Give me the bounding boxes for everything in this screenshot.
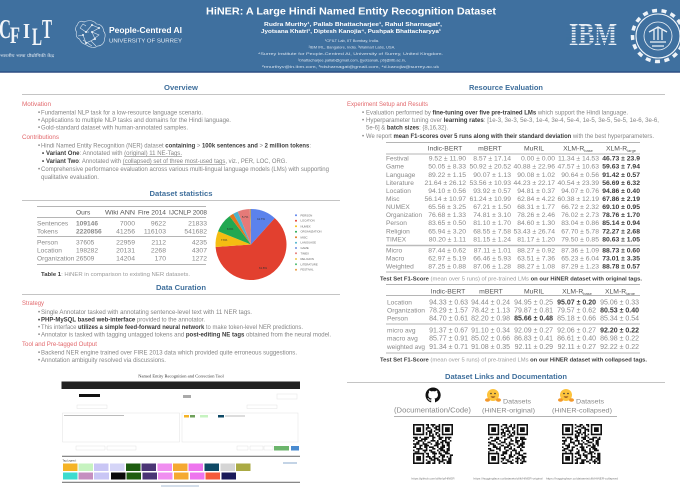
table: collapsed tags: 82.20 ± 0.98: [471, 316, 510, 322]
table: original tags: MuRIL: [524, 146, 544, 152]
annotation tool screenshot: Named Entity Recognition and Correction Tool: [138, 374, 224, 378]
pie legend: [295, 213, 322, 272]
table: original tags: 76.02 ± 2.73: [561, 212, 599, 219]
table: original tags: 21.64 ± 26.12: [424, 180, 466, 187]
table: original tags: Weighted: [386, 263, 414, 270]
table: comparison with existing NER datasets: 109146: [76, 220, 98, 228]
table: comparison with existing NER datasets: 198282: [76, 248, 98, 254]
contributions text: Variant Two: Annotated with (collapsed) set of three most-used tags, viz., PER, LOC, ORG.: [46, 159, 287, 165]
icon: hugging face collapsed: [558, 389, 574, 402]
motivation text: •: [38, 110, 40, 116]
table: original tags: 80.63 ± 1.05: [602, 236, 640, 243]
table: comparison with existing NER datasets: 21833: [188, 220, 207, 228]
table: original tags: 62.84 ± 4.22: [517, 196, 555, 203]
tool and pre-tagged output text: [22, 342, 297, 364]
table: original tags: 88.73 ± 0.60: [602, 247, 640, 254]
pie legend: ORGANIZATION: [300, 230, 322, 234]
table: original tags: Macro: [386, 255, 405, 262]
table: original tags: 62.97 ± 5.19: [428, 255, 466, 262]
pie legend: LANGUAGE: [300, 241, 316, 245]
table: collapsed tags: 92.06 ± 0.27: [557, 327, 596, 334]
table: original tags: Organization: [386, 212, 422, 219]
strategy text: •: [38, 310, 40, 316]
table: original tags: 93.92 ± 0.57: [473, 188, 511, 195]
table: original tags: 56.69 ± 6.32: [602, 180, 640, 187]
panel: dataset links and documentation: [347, 372, 665, 480]
pie chart: 8.9%: [227, 227, 234, 231]
table: original tags: 67.86 ± 2.19: [602, 196, 640, 203]
pie chart: 7.6%: [221, 238, 228, 242]
table: original tags: 46.73 ± 23.9: [602, 156, 640, 162]
label: datasets collapsed: Datasets: [576, 398, 605, 406]
table: original tags: TIMEX: [386, 236, 407, 243]
table: original tags: 90.08 ± 1.02: [517, 172, 555, 179]
table: original tags: 88.27 ± 1.08: [517, 263, 555, 270]
table: original tags: 94.81 ± 0.37: [517, 188, 555, 195]
experiment setup text: •: [362, 110, 364, 116]
table: original tags: 50.05 ± 8.33: [428, 164, 466, 170]
table: original tags: 89.22 ± 1.15: [428, 172, 466, 179]
table: comparison with existing NER datasets: 14204: [116, 256, 135, 262]
logo: CFILT: L: [32, 24, 42, 51]
table: collapsed tags: 92.11 ± 0.29: [515, 344, 553, 351]
table: comparison with existing NER datasets: Organization: [37, 256, 75, 262]
table: original tags: XLM-R: [563, 146, 584, 152]
table: original tags: 44.23 ± 22.17: [513, 180, 555, 187]
table: comparison with existing NER datasets: 7000: [120, 220, 135, 228]
table: collapsed tags: 85.18 ± 0.66: [557, 316, 596, 322]
table: collapsed tags: 95.07 ± 0.20: [557, 300, 596, 306]
table: collapsed tags: 95.06 ± 0.33: [600, 300, 639, 306]
table: comparison with existing NER datasets: 4307: [192, 248, 207, 254]
strategy text: Single Annotator tasked with annotating sentence-level text with 11 NER tags.: [41, 310, 252, 316]
header banner: [0, 0, 680, 73]
table: collapsed tags: [386, 284, 640, 353]
table: original tags: Game: [386, 164, 404, 170]
authors: Rudra Murthy¹, Pallab Bhattacharjee¹, Rahul Sharnagat²,: [264, 21, 443, 28]
contributions text: Contributions: [22, 135, 59, 141]
logo: People-Centred AI: UNIVERSITY OF SURREY: [109, 38, 182, 44]
table: original tags: 68.55 ± 7.58: [473, 228, 511, 235]
table: collapsed tags: 86.83 ± 0.41: [514, 336, 553, 342]
table: comparison with existing NER datasets: Person: [37, 240, 58, 246]
table: original tags: 85.14 ± 0.94: [602, 220, 640, 227]
table: original tags: Misc: [386, 196, 400, 203]
table: collapsed tags: Organization: [387, 308, 425, 314]
table: collapsed tags: 92.11 ± 0.27: [558, 344, 596, 351]
table: comparison with existing NER datasets: 116103: [144, 228, 166, 236]
panel: data curation: [22, 283, 340, 486]
table: original tags: large: [627, 148, 637, 153]
table: original tags: 9.52 ± 11.90: [429, 156, 466, 162]
authors: [261, 21, 443, 35]
logo: CFILT: T: [42, 14, 52, 44]
table: collapsed tags: Location: [387, 300, 412, 306]
table: original tags: XLM-R: [606, 146, 627, 152]
strategy text: This interface utilizes a simple feed-forward neural network to make token-level NER predictions.: [41, 325, 303, 331]
table: collapsed tags: 91.08 ± 0.35: [471, 344, 510, 351]
strategy text: •: [38, 318, 40, 324]
affiliations: ¹CFILT Lab, IIT Bombay, India.: [325, 38, 379, 43]
pie legend: LOCATION: [300, 219, 315, 223]
dataset URLs: https://github.com/cfiltnlp/HiNER: [411, 476, 455, 480]
logo: IIT Bombay gear: [632, 10, 680, 62]
pie chart: 5.7%: [242, 215, 249, 219]
table: original tags: 88.27 ± 0.92: [517, 247, 555, 254]
table: collapsed tags: Indic-BERT: [431, 288, 465, 295]
label: datasets original: [482, 398, 535, 414]
table: original tags: 80.20 ± 1.11: [429, 236, 466, 243]
table: collapsed tags: 92.09 ± 0.27: [514, 327, 553, 334]
table: comparison with existing NER datasets: 170: [155, 256, 166, 262]
table: original tags: 83.65 ± 0.50: [428, 220, 466, 227]
QR code: HiNER collapsed: [562, 424, 602, 464]
logo: CFILT: [0, 14, 55, 58]
pie chart: 11.7%: [257, 217, 265, 221]
affiliations: ⁴Surrey Institute for People-Centred AI, University of Surrey, United Kingdom.: [258, 51, 443, 56]
contributions text: Comprehensive performance evaluation across various multi-lingual language models (LMs) with supporting: [41, 167, 329, 173]
table: comparison with existing NER datasets: Tokens: [37, 228, 59, 236]
table: comparison with existing NER datasets: Sentences: [37, 220, 69, 228]
table: original tags: 53.56 ± 10.93: [469, 180, 511, 187]
table: original tags: 87.25 ± 0.88: [428, 263, 466, 270]
pie legend: LITERATURE: [300, 262, 318, 266]
icon: github: [426, 388, 441, 402]
table: collapsed tags: 94.33 ± 0.63: [429, 300, 468, 306]
pie legend: TIMEX: [300, 251, 309, 255]
affiliations: ²IBM IRL, Bangalore, India. ³Walmart Labs, USA.: [309, 44, 395, 50]
table: collapsed tags: macro avg: [387, 336, 418, 342]
table: original tags: 90.07 ± 1.13: [473, 172, 511, 179]
table: comparison with existing NER datasets: 20131: [116, 248, 135, 254]
table: original tags: 67.70 ± 5.78: [561, 228, 599, 235]
table: original tags: 11.34 ± 14.53: [558, 156, 599, 162]
heading: resource evaluation: Resource Evaluation: [469, 83, 543, 92]
label: datasets original: Datasets: [503, 398, 532, 406]
heading: dataset links: Dataset Links and Documentation: [445, 372, 567, 381]
table: original tags: mBERT: [478, 146, 502, 152]
table: original tags: 74.81 ± 3.10: [473, 212, 511, 219]
caption: original tags: Test Set F1-Score (mean over 5 runs) of pre-trained LMs on our HiNER dataset with original tags.: [380, 276, 642, 282]
panel: dataset statistics: [22, 189, 340, 280]
table: comparison with existing NER datasets: Location: [37, 248, 62, 254]
table: comparison with existing NER datasets: 2112: [151, 240, 166, 246]
tool and pre-tagged output text: •: [38, 350, 40, 356]
table: original tags: 65.23 ± 6.04: [561, 255, 599, 262]
table: collapsed tags: 85.66 ± 0.48: [514, 316, 553, 322]
table: collapsed tags: 92.20 ± 0.22: [600, 327, 639, 334]
table: collapsed tags: 78.29 ± 1.57: [429, 308, 468, 314]
contributions text: •: [42, 159, 44, 165]
dataset URLs: https://huggingface.co/datasets/cfilt/HiNER-original: [474, 476, 543, 480]
table: original tags: 87.11 ± 1.01: [474, 247, 511, 254]
table: original tags: 94.86 ± 0.40: [602, 188, 640, 195]
panel: resource evaluation: [340, 83, 665, 363]
experiment setup text: Hyperparameter tuning over learning rates: [1e-3, 3e-3, 5e-3, 1e-4, 3e-4, 5e-4, 1e-5, 3e-5, 5e-5, 1e-6, 3e-6,: [366, 118, 659, 124]
contributions text: Hindi Named Entity Recognition (NER) dataset containing > 100k sentences and > 2 million tokens:: [41, 144, 311, 150]
logo: IBM: IBM: [569, 16, 617, 52]
motivation text: Applications to multiple NLP tasks and domains for the Hindi language.: [41, 118, 231, 124]
table: original tags: Festival: [386, 156, 409, 162]
title: HiNER: A Large Hindi Named Entity Recognition Dataset: [206, 6, 497, 18]
label: documentation and code: (Documentation/Code): [394, 408, 471, 414]
panel: overview: [22, 83, 340, 181]
table: collapsed tags: 84.70 ± 0.61: [429, 316, 468, 322]
table: original tags: 81.17 ± 1.20: [517, 236, 555, 243]
table: collapsed tags: micro avg: [387, 327, 416, 334]
table: original tags: 53.43 ± 26.74: [513, 228, 555, 235]
table: original tags: 8.57 ± 17.14: [473, 156, 511, 162]
table: original tags: 87.36 ± 1.09: [561, 247, 599, 254]
logo: CFILT: F: [10, 23, 20, 48]
table: collapsed tags: 85.02 ± 0.66: [471, 336, 510, 342]
motivation text: [22, 102, 231, 132]
table: collapsed tags: 91.34 ± 0.71: [429, 344, 468, 351]
experiment setup text: 5e-6] & batch sizes: {8,16,32}.: [366, 126, 448, 132]
table: collapsed tags: weighted avg: [386, 344, 425, 351]
affiliations: [258, 38, 443, 69]
experiment setup text: •: [362, 134, 364, 140]
contributions text: Variant One: Annotated with (original) 11 NE-Tags.: [46, 151, 182, 157]
table: original tags: 87.44 ± 0.62: [428, 247, 466, 254]
table: comparison with existing NER datasets: [37, 206, 207, 264]
motivation text: •: [38, 126, 40, 132]
table: original tags: 76.68 ± 1.33: [428, 212, 466, 219]
table: collapsed tags: 91.10 ± 0.34: [471, 327, 510, 334]
table: original tags: 40.54 ± 23.39: [557, 180, 599, 187]
table: original tags: 66.72 ± 2.32: [561, 204, 599, 211]
table: original tags: Literature: [386, 180, 414, 187]
pie chart: 61.8%: [259, 266, 267, 270]
table: collapsed tags: 94.95 ± 0.25: [514, 300, 553, 306]
table: collapsed tags: 79.87 ± 0.81: [514, 308, 553, 314]
logo: CFILT: I: [23, 19, 30, 43]
dataset URLs: https://huggingface.co/datasets/cfilt/HiNER-collapsed: [546, 476, 618, 480]
experiment setup text: We report mean F1-scores over 5 runs along with their standard deviation with the best hyperparameters.: [366, 134, 654, 140]
table: comparison with existing NER datasets: 9622: [151, 220, 166, 228]
table: original tags: 61.24 ± 10.99: [469, 196, 511, 203]
motivation text: Gold-standard dataset with human-annotated samples.: [41, 126, 188, 132]
label: datasets collapsed: [552, 398, 612, 414]
table: original tags: 81.15 ± 1.24: [473, 236, 511, 243]
table: original tags: 87.29 ± 1.23: [561, 263, 599, 270]
table: original tags: 73.01 ± 3.35: [602, 255, 640, 262]
tool and pre-tagged output text: Annotation ambiguity resolved via discussions.: [41, 358, 166, 364]
table: original tags: 67.21 ± 1.50: [473, 204, 511, 211]
caption: collapsed tags: Test Set F1-Score (mean over 5 runs) of pre-trained LMs on our HiNER dataset with collapsed tags.: [380, 357, 647, 363]
table: original tags: 94.10 ± 0.56: [428, 188, 466, 195]
affiliations: ¹bhattacharjee.pallab@gmail.com, {jyotsanak, pb}@iitb.ac.in,: [298, 58, 406, 62]
table: original tags: 63.51 ± 7.36: [517, 255, 555, 262]
table: original tags: 56.14 ± 10.97: [424, 196, 466, 203]
table: original tags: 69.10 ± 0.95: [602, 204, 640, 211]
tool and pre-tagged output text: •: [38, 358, 40, 364]
table: comparison with existing NER datasets: 37605: [76, 240, 95, 246]
table: original tags: NUMEX: [386, 204, 410, 211]
table: collapsed tags: 92.22 ± 0.22: [600, 344, 639, 351]
table: original tags: 87.06 ± 1.28: [473, 263, 511, 270]
experiment setup text: •: [362, 118, 364, 124]
pie legend: GAME: [300, 246, 309, 250]
contributions text: •: [38, 144, 40, 150]
pie legend: MISC: [300, 235, 308, 239]
table: original tags: 79.50 ± 0.85: [561, 236, 599, 243]
strategy text: •: [38, 332, 40, 338]
table: original tags: Micro: [386, 247, 402, 254]
table: comparison with existing NER datasets: 1272: [192, 256, 207, 262]
icon: hugging face original: [485, 389, 501, 402]
annotation tool screenshot: [62, 374, 300, 486]
contributions text: •: [42, 151, 44, 157]
table: original tags: 47.57 ± 10.63: [557, 164, 599, 170]
table: collapsed tags: 91.37 ± 0.67: [429, 327, 468, 334]
table: comparison with existing NER datasets: 2268: [151, 248, 166, 254]
experiment setup text: Evaluation performed by fine-tuning over five pre-trained LMs which support the Hindi language.: [366, 110, 628, 116]
table: original tags: 50.92 ± 20.52: [469, 164, 511, 170]
experiment setup text: Experiment Setup and Results: [347, 102, 428, 108]
table caption: Table 1: HiNER in comparison to existing NER datasets.: [41, 272, 190, 278]
table: original tags: 88.78 ± 0.57: [602, 263, 640, 270]
table: original tags: 81.10 ± 1.70: [473, 220, 511, 227]
table: comparison with existing NER datasets: 541682: [184, 228, 207, 236]
logo: People-Centred AI: [76, 21, 182, 47]
table: original tags: 72.27 ± 2.68: [602, 228, 640, 235]
table: collapsed tags: 80.53 ± 0.40: [600, 308, 639, 314]
table: collapsed tags: base: [583, 291, 593, 296]
table: collapsed tags: 85.34 ± 0.54: [600, 316, 639, 322]
annotation tool screenshot: Tag Legend:: [62, 460, 77, 462]
heading: overview: Overview: [164, 83, 198, 92]
contributions text: qualitative evaluation.: [41, 175, 99, 181]
table: comparison with existing NER datasets: 41256: [116, 228, 135, 236]
table: comparison with existing NER datasets: 22959: [116, 240, 135, 246]
table: original tags: 59.63 ± 7.94: [602, 164, 640, 170]
contributions text: [22, 135, 329, 181]
pie chart: [216, 209, 287, 280]
label: datasets original: (HiNER-original): [482, 408, 535, 414]
table: original tags: base: [584, 148, 594, 153]
table: collapsed tags: XLM-R: [605, 288, 626, 295]
table: original tags: 0.00 ± 0.00: [521, 156, 555, 162]
strategy text: Strategy: [22, 301, 44, 307]
table: collapsed tags: large: [626, 291, 636, 296]
strategy text: •: [38, 325, 40, 331]
table: original tags: 90.64 ± 0.56: [561, 172, 599, 179]
table: comparison with existing NER datasets: IJCNLP 2008: [169, 210, 207, 216]
motivation text: Motivation: [22, 102, 51, 108]
table: original tags: 83.04 ± 0.86: [561, 220, 599, 227]
table: collapsed tags: MuRIL: [524, 288, 544, 295]
pie legend: FESTIVAL: [300, 268, 314, 272]
table: original tags: 84.60 ± 1.30: [517, 220, 555, 227]
table: original tags: 91.42 ± 0.57: [602, 172, 640, 179]
pie legend: RELIGION: [300, 257, 314, 261]
table: original tags: Person: [386, 220, 407, 227]
experiment setup text: [347, 102, 659, 140]
authors: Jyotsana Khatri¹, Diptesh Kanojia⁴, Pushpak Bhattacharyya¹: [261, 28, 441, 35]
logo: People-Centred AI: People-Centred AI: [109, 26, 182, 35]
tool and pre-tagged output text: Backend NER engine trained over FIRE 2013 data which provided quite erroneous suggestions.: [41, 350, 297, 356]
strategy text: PHP-MySQL based web-interface provided to the annotator.: [41, 318, 205, 324]
table: original tags: Indic-BERT: [428, 146, 462, 152]
heading: data curation: Data Curation: [156, 283, 206, 292]
table: collapsed tags: Person: [387, 316, 408, 322]
table: collapsed tags: mBERT: [479, 288, 503, 295]
table: original tags: 60.38 ± 12.19: [557, 196, 599, 203]
table: collapsed tags: 79.57 ± 0.62: [557, 308, 596, 314]
table: original tags: 65.94 ± 3.20: [428, 228, 466, 235]
label: datasets collapsed: (HiNER-collapsed): [552, 408, 612, 414]
table: collapsed tags: 94.44 ± 0.24: [471, 300, 510, 306]
table: collapsed tags: XLM-R: [562, 288, 583, 295]
table: comparison with existing NER datasets: Wiki ANN: [105, 210, 135, 216]
table: original tags: 65.56 ± 3.25: [428, 204, 466, 211]
strategy text: [22, 301, 331, 338]
tool and pre-tagged output text: Tool and Pre-tagged Output: [22, 342, 97, 348]
table: original tags: 94.07 ± 0.76: [561, 188, 599, 195]
QR code: github: [413, 424, 453, 464]
table: comparison with existing NER datasets: Ours: [76, 210, 91, 216]
motivation text: •: [38, 118, 40, 124]
pie legend: PERSON: [300, 213, 312, 217]
QR code: HiNER original: [488, 424, 528, 464]
table: original tags: 78.26 ± 2.46: [517, 212, 555, 219]
heading: dataset statistics: Dataset statistics: [150, 189, 212, 198]
pie legend: NUMEX: [300, 224, 311, 228]
table: comparison with existing NER datasets: 4235: [192, 240, 207, 246]
table: collapsed tags: 86.98 ± 0.22: [600, 336, 639, 342]
motivation text: Fundamental NLP task for a low-resource language scenario.: [41, 110, 203, 116]
contributions text: •: [38, 167, 40, 173]
table: original tags: 78.76 ± 1.70: [602, 212, 640, 219]
logo: CFILT: भारतीय भाषा प्रौद्योगिकी केंद्र: [0, 53, 55, 58]
affiliations: ²rmurthyv@in.ibm.com, ³rdsharnagat@gmail.com, ⁴d.kanojia@surrey.ac.uk: [262, 64, 439, 69]
table: collapsed tags: 85.77 ± 0.91: [429, 336, 468, 342]
table: comparison with existing NER datasets: 26509: [76, 256, 95, 262]
table: original tags: 68.31 ± 1.77: [517, 204, 555, 211]
table: original tags: Location: [386, 188, 411, 195]
table: original tags: [386, 142, 640, 272]
table: original tags: 40.88 ± 22.96: [513, 164, 555, 170]
table: original tags: Religion: [386, 228, 410, 235]
table: original tags: 66.46 ± 5.93: [473, 255, 511, 262]
dataset URLs: [411, 476, 618, 480]
table: original tags: Language: [386, 172, 416, 179]
table: comparison with existing NER datasets: 2220856: [76, 228, 102, 236]
table: collapsed tags: 78.42 ± 1.13: [471, 308, 510, 314]
strategy text: Annotator is tasked with tagging untagged tokens and post-editing NE tags obtained from the neural model.: [41, 332, 331, 338]
table: comparison with existing NER datasets: Fire 2014: [138, 210, 166, 216]
table: collapsed tags: 86.61 ± 0.40: [557, 336, 596, 342]
